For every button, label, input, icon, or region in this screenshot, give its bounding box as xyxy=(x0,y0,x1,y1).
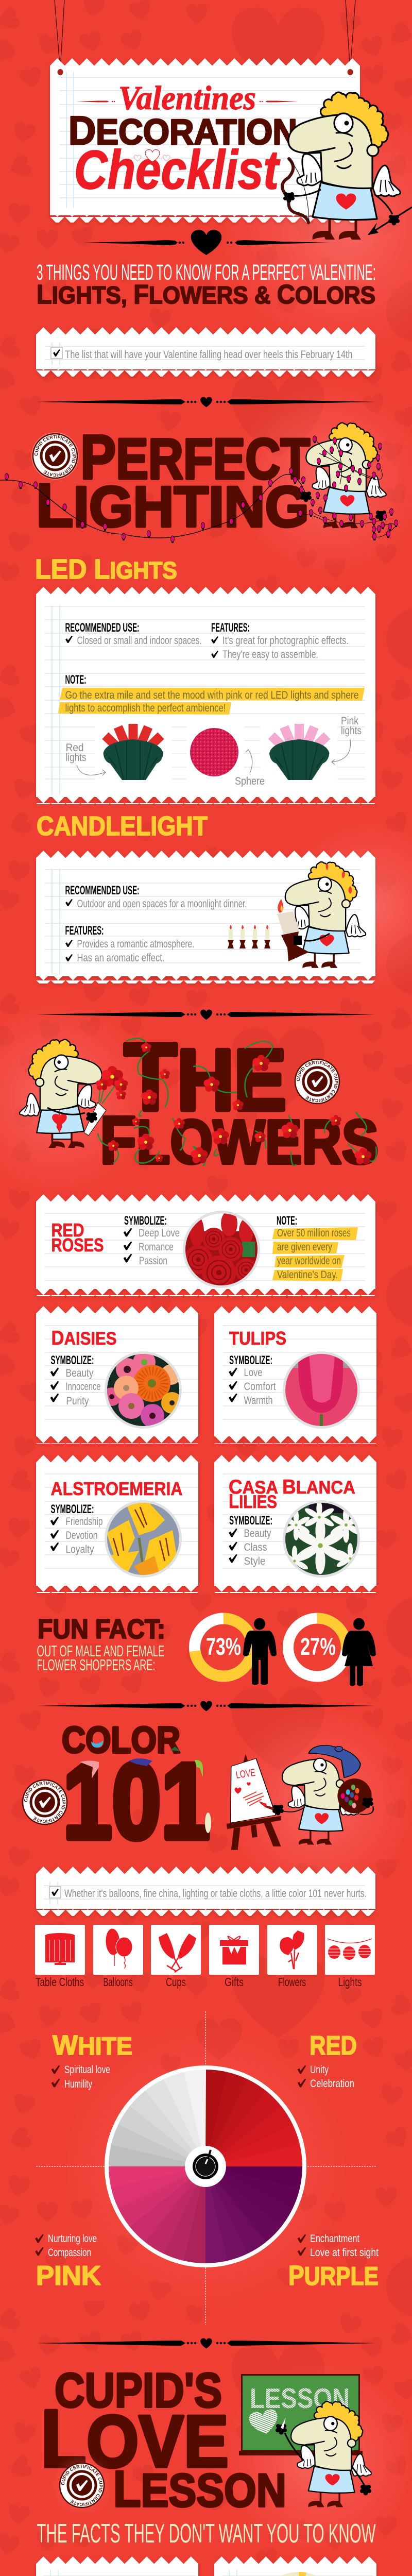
word: cupid's: CUPID'S xyxy=(55,2363,222,2418)
icon: lights xyxy=(325,1925,375,1989)
fun fact text: FLOWER SHOPPERS ARE: xyxy=(37,1656,156,1674)
fun fact text xyxy=(37,1642,165,1674)
color: pink xyxy=(35,2233,101,2291)
flourishes xyxy=(76,101,298,102)
divider xyxy=(37,2338,375,2348)
note xyxy=(272,1214,358,1281)
photo: alstroemeria xyxy=(105,1500,182,1578)
color wheel xyxy=(105,2065,306,2267)
cupid painter xyxy=(259,1745,373,1845)
red LED bulb xyxy=(102,724,164,780)
panel: color note xyxy=(36,1867,375,1916)
divider xyxy=(37,397,375,407)
panel: red roses xyxy=(36,1194,375,1296)
title: Decoration: DECORATION xyxy=(68,108,297,153)
title: Checklist: Checklist xyxy=(74,140,280,200)
bulb labels and arrows: Sphere xyxy=(235,775,265,787)
checkbox xyxy=(51,347,62,359)
donut: women 27% xyxy=(288,1618,346,1676)
symbolize list xyxy=(50,1353,101,1407)
panel: pet owners xyxy=(214,2556,376,2576)
flower name: ROSES xyxy=(52,1234,104,1256)
note: NOTE: xyxy=(277,1214,297,1228)
word: the: THE xyxy=(124,1024,286,1130)
color: purple: PURPLE xyxy=(288,2260,379,2291)
use and feature items: They're easy to assemble. xyxy=(222,649,318,660)
panel: title sign xyxy=(50,58,360,223)
symbolize list: Love xyxy=(244,1367,263,1379)
heading: lights flowers colors: LIGHTS, FLOWERS & COLORS xyxy=(37,280,375,310)
sign paper xyxy=(50,58,360,223)
heading: candlelight: CANDLELIGHT xyxy=(37,811,208,841)
heading: color 101 xyxy=(22,1720,211,1861)
donut: men 73%: 73% xyxy=(206,1633,241,1660)
bulb labels and arrows: Red xyxy=(66,742,83,754)
chalkboard xyxy=(239,2375,363,2455)
color: pink: Nurturing love xyxy=(48,2233,97,2245)
use and feature items: Closed or small and indoor spaces. xyxy=(77,635,202,647)
fun fact text: OUT OF MALE AND FEMALE xyxy=(37,1642,165,1660)
heading: the flowers xyxy=(97,1024,379,1178)
panel: LED lights xyxy=(36,587,375,804)
note heading: NOTE: xyxy=(65,673,87,687)
easel and painter cupid xyxy=(227,1745,373,1850)
features: FEATURES: xyxy=(65,924,104,938)
dotted guide lines xyxy=(36,2011,376,2325)
canvas drawing: LOVE xyxy=(235,1767,256,1781)
symbolize list xyxy=(50,1502,103,1555)
recommended use: RECOMMENDED USE: xyxy=(65,884,139,897)
symbolize list: Friendship xyxy=(66,1516,103,1528)
character: cupid with bouquet xyxy=(20,1040,128,1148)
icon: table cloths xyxy=(35,1925,85,1989)
donut: 3% xyxy=(258,2572,339,2576)
note: Valentine's Day. xyxy=(277,1269,338,1281)
symbolize list: Romance xyxy=(139,1241,174,1253)
panel: candlelight xyxy=(36,851,375,984)
divider xyxy=(37,1701,375,1711)
features: FEATURES: xyxy=(211,621,250,635)
symbolize list xyxy=(124,1214,180,1267)
color: white: WHITE xyxy=(53,2030,132,2061)
flower name: CASA BLANCA xyxy=(229,1476,355,1498)
symbolize list: SYMBOLIZE: xyxy=(50,1502,94,1516)
icon: balloons: Balloons xyxy=(103,1975,133,1989)
symbolize list: Devotion xyxy=(66,1530,98,1541)
flower name: ALSTROEMERIA xyxy=(50,1478,183,1499)
icon: man xyxy=(243,1618,277,1685)
small hearts xyxy=(134,150,170,162)
heading: LED lights: LED LIGHTS xyxy=(35,554,177,585)
title: Valentines: Valentines xyxy=(118,79,256,117)
note: year worldwide on xyxy=(277,1255,341,1267)
symbolize list: SYMBOLIZE: xyxy=(50,1353,94,1367)
symbolize list: Innocence xyxy=(66,1381,101,1393)
wheel segment: white xyxy=(109,2067,227,2166)
icon: flowers xyxy=(267,1925,317,1989)
symbolize list: Class xyxy=(244,1541,267,1553)
symbolize list: SYMBOLIZE: xyxy=(229,1514,272,1528)
photo: lilies xyxy=(283,1500,360,1578)
hanging strings xyxy=(55,0,355,71)
symbolize list: SYMBOLIZE: xyxy=(229,1353,272,1367)
symbolize list xyxy=(229,1514,272,1567)
use item: Outdoor and open spaces for a moonlight dinner. xyxy=(77,898,247,910)
panel: intro note xyxy=(36,327,375,377)
symbolize list: Passion xyxy=(139,1255,167,1267)
icon cards xyxy=(35,1925,375,1989)
symbolize list xyxy=(229,1353,276,1406)
flower name xyxy=(229,1476,355,1513)
panel: casa blanca lilies xyxy=(214,1455,376,1593)
symbolize list: Beauty xyxy=(244,1528,271,1539)
icon: cups xyxy=(151,1925,201,1989)
icon: gifts: Gifts xyxy=(225,1975,244,1989)
icon: table cloths: Table Cloths xyxy=(36,1975,84,1989)
small candles xyxy=(228,925,270,948)
stamp xyxy=(57,2456,107,2510)
divider xyxy=(37,1010,375,1020)
character: cupid wrapped in lights xyxy=(300,423,397,537)
word: color: COLOR xyxy=(62,1720,180,1761)
word: love: LOVE xyxy=(41,2393,229,2484)
word: lesson: LESSON xyxy=(113,2460,286,2517)
panel: daisies xyxy=(36,1306,198,1444)
color: white xyxy=(52,2030,132,2090)
color: purple: Enchantment xyxy=(310,2233,359,2245)
character: cupid with candle xyxy=(277,862,366,968)
use and feature items: It's great for photographic effects. xyxy=(222,635,349,647)
note: are given every xyxy=(277,1241,332,1253)
character: teaching cupid xyxy=(276,2401,371,2507)
panel: tulips xyxy=(214,1306,376,1444)
string of lights xyxy=(0,436,398,543)
wheel segment: pink xyxy=(106,2145,205,2263)
panel: candy hearts xyxy=(36,2556,198,2576)
color: pink: PINK xyxy=(36,2261,101,2291)
bulb labels and arrows: Pink xyxy=(341,715,358,727)
donut: women 27%: 27% xyxy=(300,1633,336,1660)
flower name: TULIPS xyxy=(229,1328,286,1349)
word: lighting: LIGHTING xyxy=(36,471,309,540)
color: red: RED xyxy=(310,2031,357,2061)
fun fact xyxy=(37,1614,376,1686)
icon: balloons xyxy=(93,1925,143,1989)
color: pink: Compassion xyxy=(48,2247,91,2259)
heading: perfect lighting xyxy=(31,422,311,540)
flower name: LILIES xyxy=(229,1490,277,1513)
color: purple: Love at first sight xyxy=(310,2247,379,2259)
symbolize list: SYMBOLIZE: xyxy=(124,1214,167,1228)
bulb labels and arrows xyxy=(66,715,362,787)
note: Over 50 million roses xyxy=(277,1227,351,1239)
feature item: Has an aromatic effect. xyxy=(77,952,165,964)
use and feature items xyxy=(65,635,349,660)
wheel segment: purple xyxy=(184,2166,302,2266)
heart divider xyxy=(83,230,330,255)
color: white: Spiritual love xyxy=(64,2064,110,2076)
bulb labels and arrows: lights xyxy=(66,752,87,764)
number: 101: 101 xyxy=(63,1741,210,1861)
flower name: RED xyxy=(52,1219,84,1241)
symbolize list: Comfort xyxy=(244,1381,276,1393)
word: perfect: PERFECT xyxy=(80,422,310,492)
stamp: CUPID CERTIFICATE CUPID CERTIFICATE xyxy=(24,1782,66,1823)
flower name xyxy=(52,1219,104,1256)
photo: daisies xyxy=(105,1351,182,1429)
word: flowers: FLOWERS xyxy=(100,1102,379,1178)
color: white: Humility xyxy=(64,2078,92,2090)
flowers on letters xyxy=(108,1042,372,1164)
icon: woman xyxy=(342,1618,376,1686)
highlighted note: Go the extra mile and set the mood with pink or red LED lights and sphere xyxy=(65,689,358,701)
wheel segment: red xyxy=(205,2070,305,2188)
icon: lights: Lights xyxy=(338,1975,362,1989)
recommended use: RECOMMENDED USE: xyxy=(65,621,139,635)
icon: cups: Cups xyxy=(166,1975,186,1989)
color: red: Celebration xyxy=(310,2078,354,2090)
photo: roses xyxy=(183,1211,260,1290)
sphere lights xyxy=(190,728,238,776)
symbolize list: Style xyxy=(244,1555,266,1567)
feature item: Provides a romantic atmosphere. xyxy=(77,938,195,950)
color: red xyxy=(298,2031,357,2090)
paint drips xyxy=(80,1740,211,1833)
easel xyxy=(227,1754,281,1850)
symbolize list: Deep Love xyxy=(139,1227,180,1239)
wheel hub xyxy=(185,2146,226,2187)
character: cupid with bow xyxy=(282,92,412,240)
fun fact heading: FUN FACT: xyxy=(38,1614,165,1645)
symbolize list: Loyalty xyxy=(66,1544,94,1555)
string holes xyxy=(58,69,353,75)
symbolize list: Warmth xyxy=(244,1395,273,1406)
color: red: Unity xyxy=(310,2064,329,2076)
bulb labels and arrows: lights xyxy=(341,725,362,737)
chalk word: LESSON xyxy=(250,2382,350,2414)
stamp: CUPID CERTIFICATE CUPID CERTIFICATE xyxy=(34,435,76,477)
photo: tulip xyxy=(283,1350,360,1432)
symbolize list: Purity xyxy=(66,1395,89,1407)
highlighted note: lights to accomplish the perfect ambience! xyxy=(65,702,226,714)
donut: men 73% xyxy=(195,1619,252,1676)
stamp: CUPID CERTIFICATE CUPID CERTIFICATE xyxy=(297,1060,338,1103)
heading: cupid's love lesson xyxy=(41,2363,286,2517)
highlighted note xyxy=(58,688,365,715)
stamp: CUPID CERTIFICATE CUPID CERTIFICATE xyxy=(61,2465,103,2506)
vines xyxy=(98,1039,376,1165)
symbolize list: Beauty xyxy=(66,1367,94,1379)
icon: flowers: Flowers xyxy=(278,1975,306,1989)
chalk heart xyxy=(248,2408,280,2436)
flower name: DAISIES xyxy=(52,1327,116,1349)
panel: alstroemeria xyxy=(36,1455,198,1593)
pink LED bulb xyxy=(268,724,330,780)
color: purple xyxy=(288,2233,379,2291)
icon: gifts xyxy=(209,1925,259,1989)
